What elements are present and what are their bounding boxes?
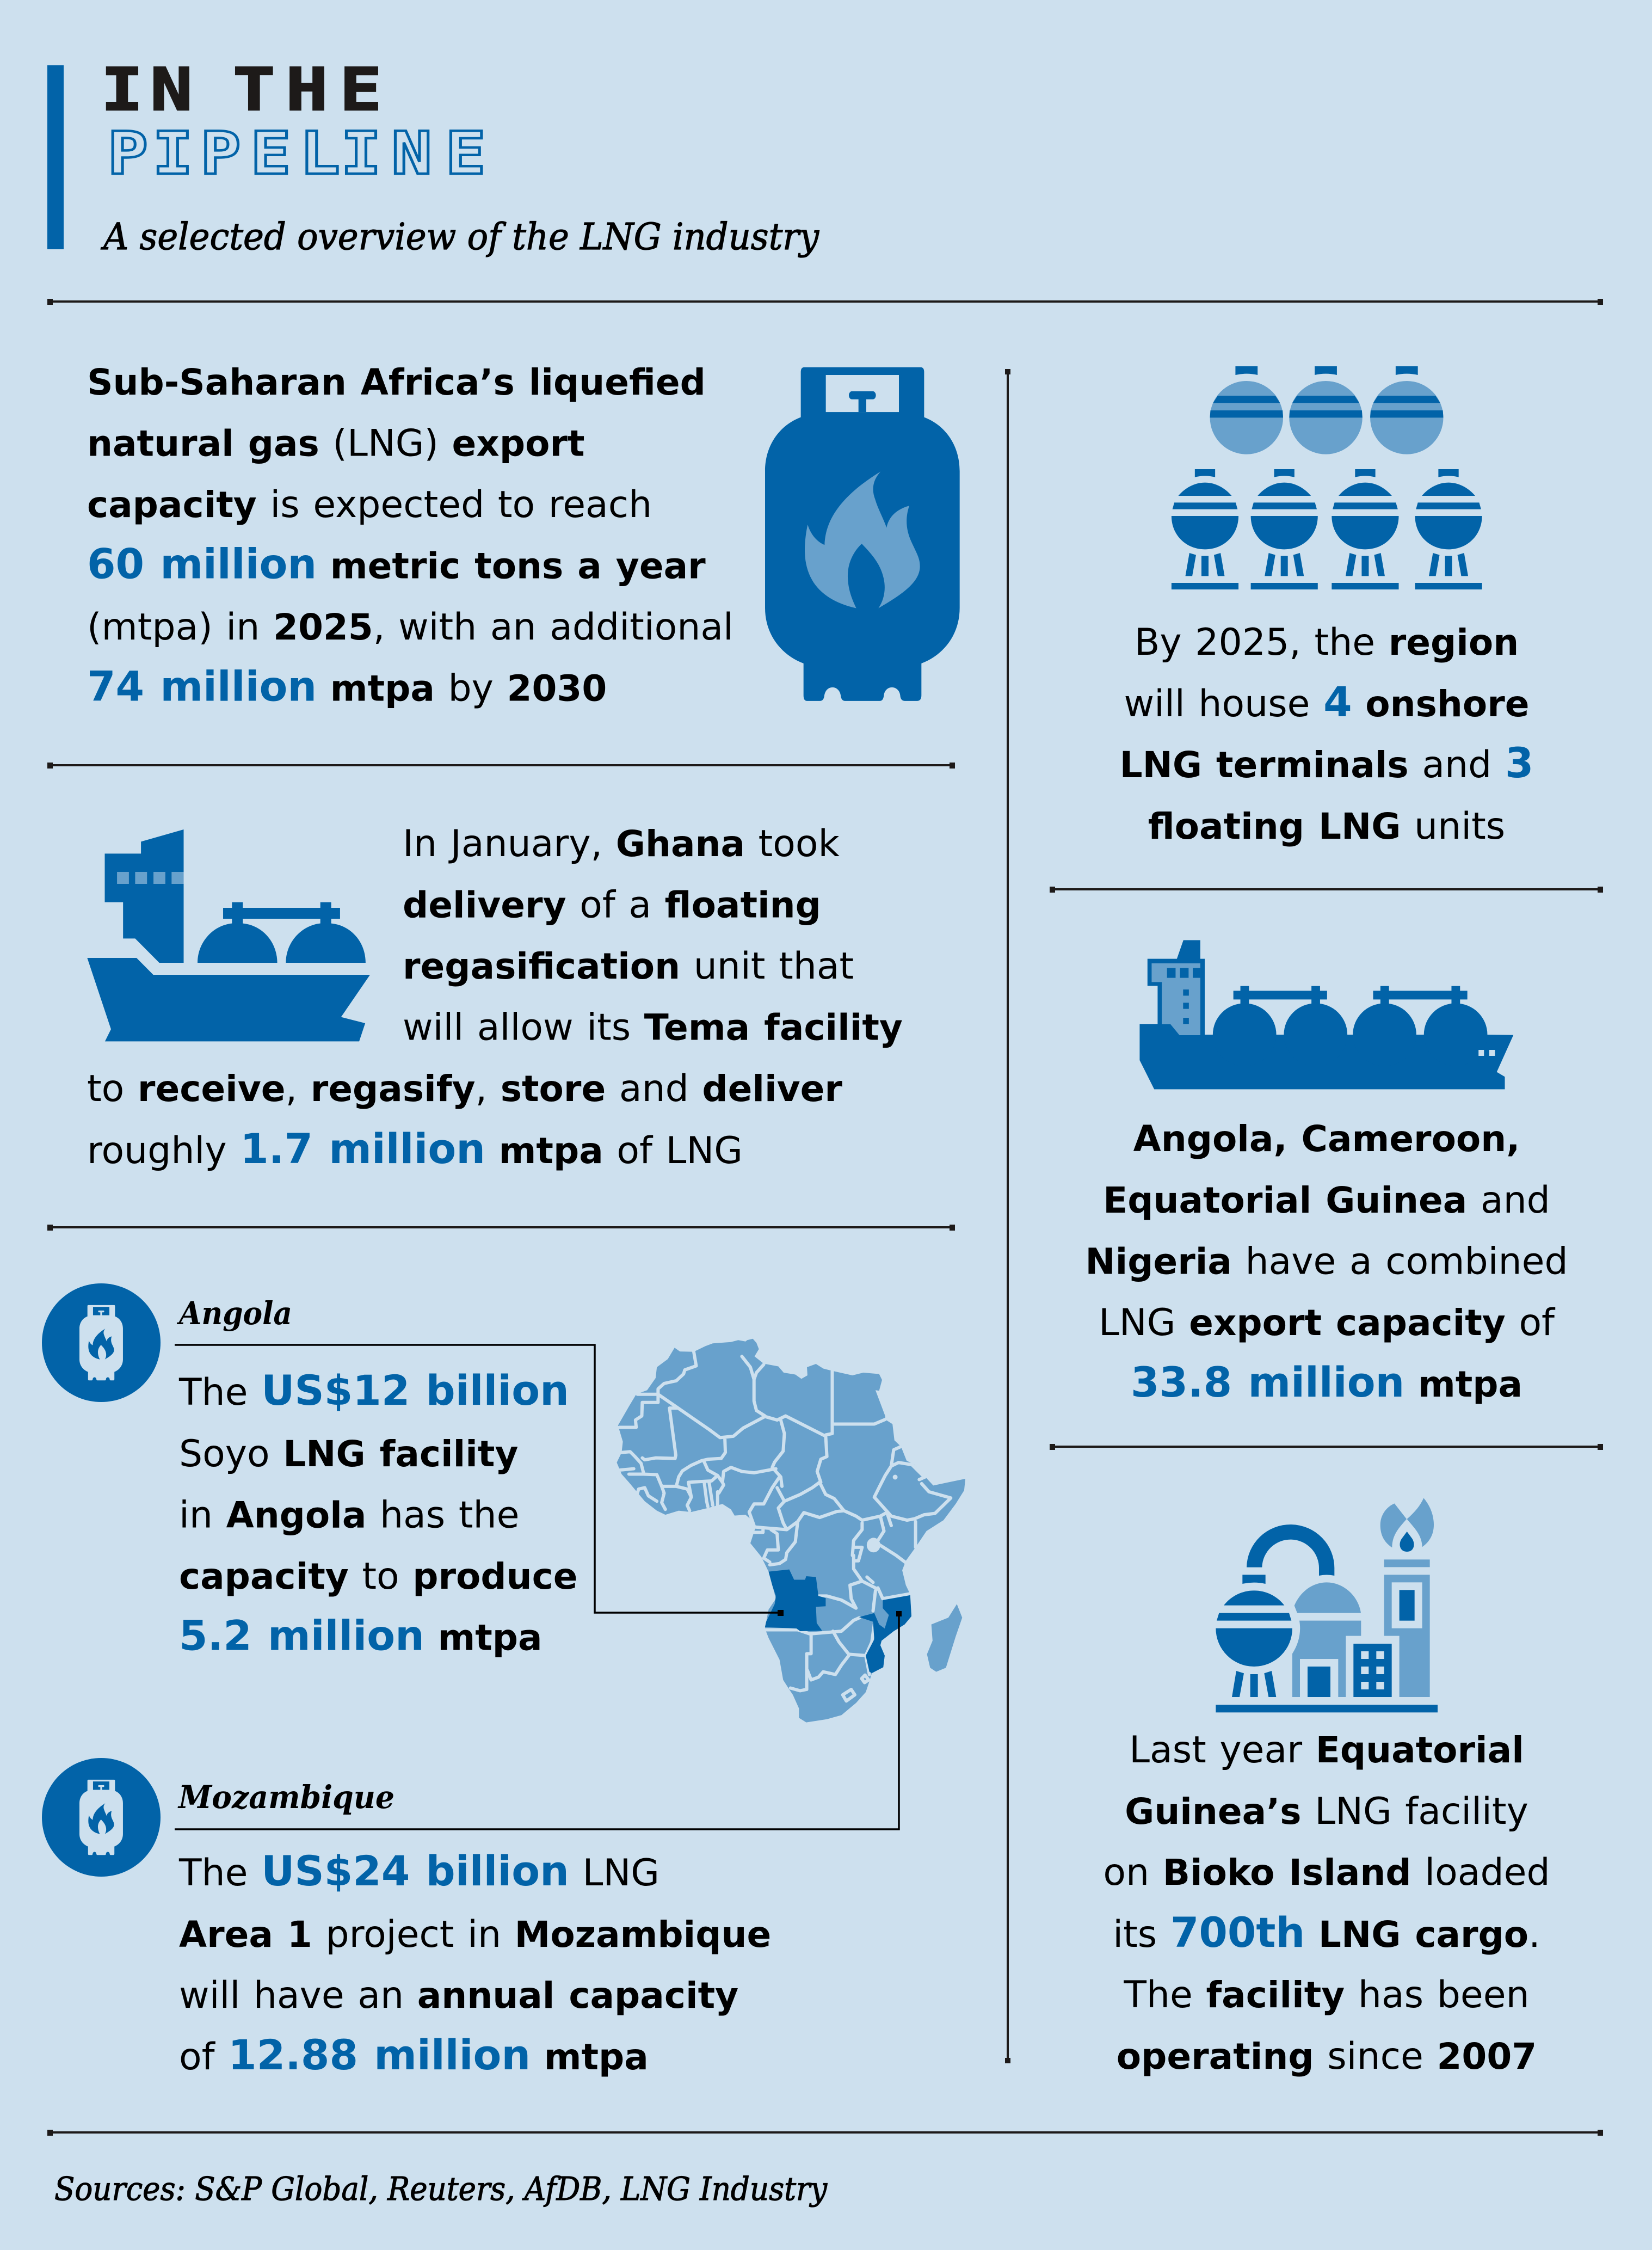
subtitle: A selected overview of the LNG industry xyxy=(100,216,819,258)
text block: Bioko Island: The facility has been xyxy=(1123,1974,1530,2017)
text block: combined capacity: 33.8 million mtpa xyxy=(1131,1358,1522,1406)
text block: Ghana: regasification unit that xyxy=(403,945,854,988)
text block: export capacity: natural gas (LNG) export xyxy=(87,422,585,465)
text block: Angola: in Angola has the xyxy=(179,1493,519,1537)
text block: Angola: 5.2 million mtpa xyxy=(179,1612,543,1660)
title: pipeline: PIPELINE xyxy=(107,120,486,188)
text block: Ghana xyxy=(87,822,903,1173)
text block: Bioko Island: on Bioko Island loaded xyxy=(1103,1851,1550,1894)
text block: combined capacity: LNG export capacity of xyxy=(1099,1301,1556,1344)
text block: terminals: will house 4 onshore xyxy=(1124,678,1530,726)
icon: storage tanks xyxy=(1172,366,1482,589)
text block: combined capacity: Equatorial Guinea and xyxy=(1103,1179,1550,1222)
text block: Mozambique xyxy=(178,1847,771,2079)
sources: Sources: S&P Global, Reuters, AfDB, LNG Industry xyxy=(54,2170,828,2208)
text block: combined capacity: Nigeria have a combined xyxy=(1085,1240,1568,1283)
label: Mozambique: Mozambique xyxy=(177,1779,394,1816)
text block: Ghana: delivery of a floating xyxy=(403,884,821,926)
icon: Mozambique badge xyxy=(42,1758,161,1877)
text block: terminals: floating LNG units xyxy=(1148,805,1505,848)
divider: vertical column xyxy=(1005,369,1010,2063)
text block: terminals: By 2025, the region xyxy=(1135,621,1519,664)
text block: Angola xyxy=(178,1367,578,1660)
text block: export capacity: capacity is expected to reach xyxy=(87,483,652,526)
text block: Angola: Soyo LNG facility xyxy=(179,1433,518,1476)
text block: Mozambique: will have an annual capacity xyxy=(179,1974,738,2017)
icon: gas cylinder xyxy=(765,367,960,701)
Mozambique xyxy=(859,1595,911,1673)
Madagascar xyxy=(927,1604,962,1672)
text block: export capacity: 74 million mtpa by 2030 xyxy=(87,663,607,711)
text block: Angola: The US$12 billion xyxy=(178,1367,569,1415)
icon: LNG facility xyxy=(1216,1498,1438,1712)
divider: right 1 xyxy=(1050,887,1603,893)
title: in the: IN THE xyxy=(101,56,382,124)
text block: Mozambique: Area 1 project in Mozambique xyxy=(179,1913,771,1956)
lakes xyxy=(867,1538,880,1552)
text block: Bioko Island: Guinea’s LNG facility xyxy=(1125,1790,1528,1833)
divider: left 2 xyxy=(47,1225,955,1231)
country borders xyxy=(619,1352,951,1701)
text block: Ghana: will allow its Tema facility xyxy=(403,1006,903,1049)
text block: Mozambique: The US$24 billion LNG xyxy=(178,1847,659,1895)
text block: Ghana: roughly 1.7 million mtpa of LNG xyxy=(87,1125,743,1173)
accent bar xyxy=(47,65,64,249)
text block: Angola: capacity to produce xyxy=(179,1555,578,1598)
text block: export capacity: 60 million metric tons a year xyxy=(87,540,706,588)
divider: left 1 xyxy=(47,763,955,769)
label: Angola: Angola xyxy=(176,1295,292,1332)
text block: terminals: LNG terminals and 3 xyxy=(1120,739,1533,787)
divider: right 2 xyxy=(1050,1444,1603,1450)
connector: Mozambique xyxy=(175,1614,899,1829)
icon: Angola badge xyxy=(42,1283,161,1402)
mainland xyxy=(617,1339,965,1723)
connector: Angola xyxy=(175,1345,781,1613)
divider: bottom xyxy=(47,2130,1603,2136)
text block: terminals xyxy=(1120,621,1533,848)
text block: Bioko Island xyxy=(1103,1729,1550,2078)
text block: Mozambique: of 12.88 million mtpa xyxy=(179,2031,649,2079)
text block: export capacity xyxy=(87,361,733,711)
map: Africa xyxy=(617,1339,965,1723)
text block: combined capacity: Angola, Cameroon, xyxy=(1133,1118,1520,1160)
text block: Ghana: to receive, regasify, store and deliver xyxy=(87,1067,842,1110)
text block: Bioko Island: its 700th LNG cargo. xyxy=(1113,1909,1540,1957)
header xyxy=(47,56,819,258)
text block: Ghana: In January, Ghana took xyxy=(403,822,840,865)
connector marker: Mozambique xyxy=(896,1611,902,1616)
divider: top xyxy=(47,299,1603,305)
Angola xyxy=(765,1570,825,1631)
text block: combined capacity xyxy=(1085,1118,1568,1406)
onshore terminals row xyxy=(1172,469,1482,589)
text block: export capacity: Sub-Saharan Africa’s liquefied xyxy=(87,361,706,403)
connector marker: Angola xyxy=(778,1610,784,1616)
icon: floating regasification ship xyxy=(87,829,370,1041)
text block: Bioko Island: Last year Equatorial xyxy=(1129,1729,1524,1772)
text block: Bioko Island: operating since 2007 xyxy=(1117,2035,1537,2078)
text block: export capacity: (mtpa) in 2025, with an additional xyxy=(87,606,733,649)
floating units row xyxy=(1210,366,1443,454)
icon: LNG carrier xyxy=(1139,940,1513,1089)
